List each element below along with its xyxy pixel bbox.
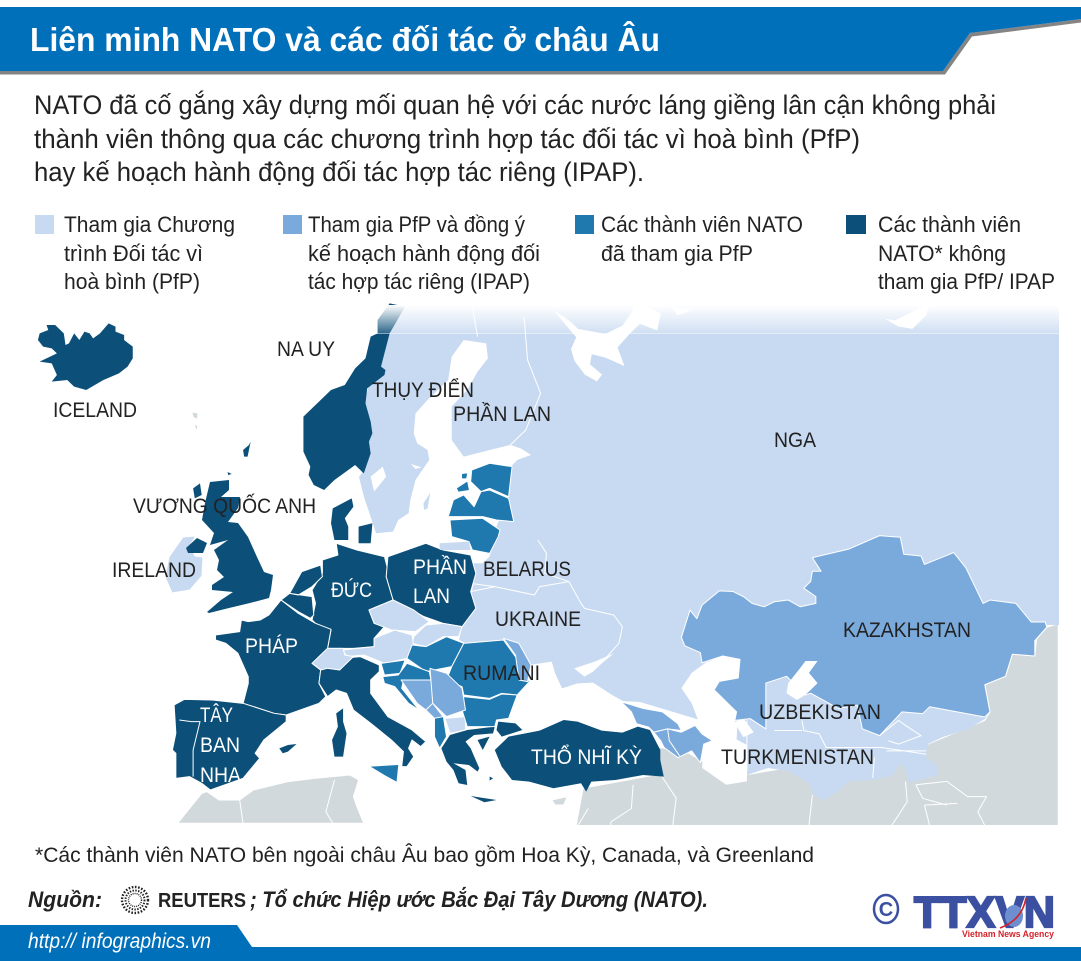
Ireland	[165, 536, 203, 593]
TTXVN logo: Vietnam News Agency	[962, 929, 1054, 939]
PfP and IPAP partners: mid-blue countries	[401, 536, 1047, 763]
legend item: NATO members not in PfP: tham gia PfP/ IPAP	[878, 269, 1055, 294]
country labels: NHA	[200, 764, 241, 787]
country labels: KAZAKHSTAN	[843, 619, 971, 642]
top fade	[366, 305, 1060, 333]
icon: Reuters dotted circle	[122, 887, 148, 913]
Poland	[386, 543, 476, 627]
Georgia, Armenia, Azerbaijan	[621, 702, 681, 732]
country labels: IRELAND	[112, 559, 196, 582]
source line	[28, 887, 708, 913]
seas and lakes	[371, 300, 930, 785]
legend item: NATO members in PfP	[575, 212, 803, 266]
source line: Nguồn:	[28, 887, 102, 912]
country labels: TÂY	[200, 704, 233, 727]
Italy	[319, 657, 426, 767]
legend item: PfP and IPAP: kế hoạch hành động đối	[308, 241, 540, 266]
Germany	[312, 543, 393, 648]
legend item: PfP and IPAP: tác hợp tác riêng (IPAP)	[308, 269, 530, 294]
intro paragraph: NATO đã cố gắng xây dựng mối quan hệ với các nước láng giềng lân cận không phải	[34, 89, 996, 120]
legend item: NATO members not in PfP	[846, 212, 1055, 294]
footnote: *Các thành viên NATO bên ngoài châu Âu bao gồm Hoa Kỳ, Canada, và Greenland	[35, 844, 814, 867]
country labels: TURKMENISTAN	[721, 746, 874, 769]
Netherlands and Belgium	[281, 565, 322, 618]
TTXVN logo: TTXVN	[914, 888, 1055, 937]
country labels: THỔ NHĨ KỲ	[531, 745, 642, 769]
map of Europe and Central Asia	[38, 300, 1060, 825]
title: Liên minh NATO và các đối tác ở châu Âu	[30, 21, 660, 58]
country labels: ĐỨC	[331, 579, 372, 602]
Iceland, Norway, Denmark	[38, 303, 405, 543]
France	[216, 600, 331, 715]
country labels: PHẦN LAN	[453, 403, 551, 426]
non-member land: grey	[178, 624, 1058, 825]
footer band	[0, 925, 1081, 961]
legend item: PfP and IPAP: Tham gia PfP và đồng ý	[308, 212, 525, 237]
country labels: PHẦN	[413, 556, 467, 579]
Kazakhstan	[681, 536, 1047, 736]
legend item: PfP: hoà bình (PfP)	[64, 269, 200, 294]
header banner	[0, 7, 1081, 74]
legend item: PfP and IPAP	[283, 212, 540, 294]
country labels: NA UY	[277, 338, 335, 361]
legend item: PfP: Tham gia Chương	[64, 212, 235, 237]
Spain and Portugal	[172, 699, 286, 790]
country labels: NGA	[774, 429, 816, 452]
Greece	[441, 727, 497, 802]
country labels: THỤY ĐIỂN	[372, 379, 474, 402]
country labels: UKRAINE	[495, 608, 581, 631]
country labels: PHÁP	[245, 635, 298, 658]
country labels: ICELAND	[53, 399, 137, 422]
Central European partners: light	[312, 600, 465, 733]
intro paragraph: thành viên thông qua các chương trình hợp tác đối tác vì hoà bình (PfP)	[34, 124, 860, 154]
legend	[35, 212, 1055, 294]
Sardinia and Balearic islands	[279, 708, 347, 757]
NATO members outside PfP: navy countries	[38, 303, 664, 802]
country labels: LAN	[413, 585, 450, 608]
partner land: Russia, Belarus, Ukraine, Sweden, Finland, Central Asia	[359, 305, 1059, 800]
country labels: VƯƠNG QUỐC ANH	[133, 494, 316, 518]
country labels: BAN	[200, 734, 240, 757]
country labels: RUMANI	[463, 662, 540, 685]
country labels: BELARUS	[483, 558, 571, 581]
intro paragraph: hay kế hoạch hành động đối tác hợp tác riêng (IPAP).	[34, 157, 644, 187]
United Kingdom	[186, 480, 273, 613]
source line: REUTERS	[158, 890, 246, 912]
country labels	[53, 338, 971, 787]
legend item: NATO members not in PfP: Các thành viên	[878, 212, 1021, 237]
intro paragraph	[34, 89, 996, 187]
TTXVN logo: C	[879, 899, 893, 921]
legend item: NATO members in PfP: Các thành viên NATO	[601, 212, 803, 237]
legend item: NATO members in PfP: đã tham gia PfP	[601, 241, 753, 266]
country labels: UZBEKISTAN	[759, 701, 881, 724]
legend item: NATO members not in PfP: NATO* không	[878, 241, 1006, 266]
legend item: PfP	[35, 212, 235, 294]
source line: ; Tổ chức Hiệp ước Bắc Đại Tây Dương (NATO).	[250, 887, 708, 912]
Turkey	[495, 720, 664, 792]
NATO members in PfP: blue countries	[371, 463, 529, 782]
Aral Sea	[787, 661, 818, 700]
legend item: PfP: trình Đối tác vì	[64, 241, 203, 266]
website: http:// infographics.vn	[28, 930, 211, 953]
